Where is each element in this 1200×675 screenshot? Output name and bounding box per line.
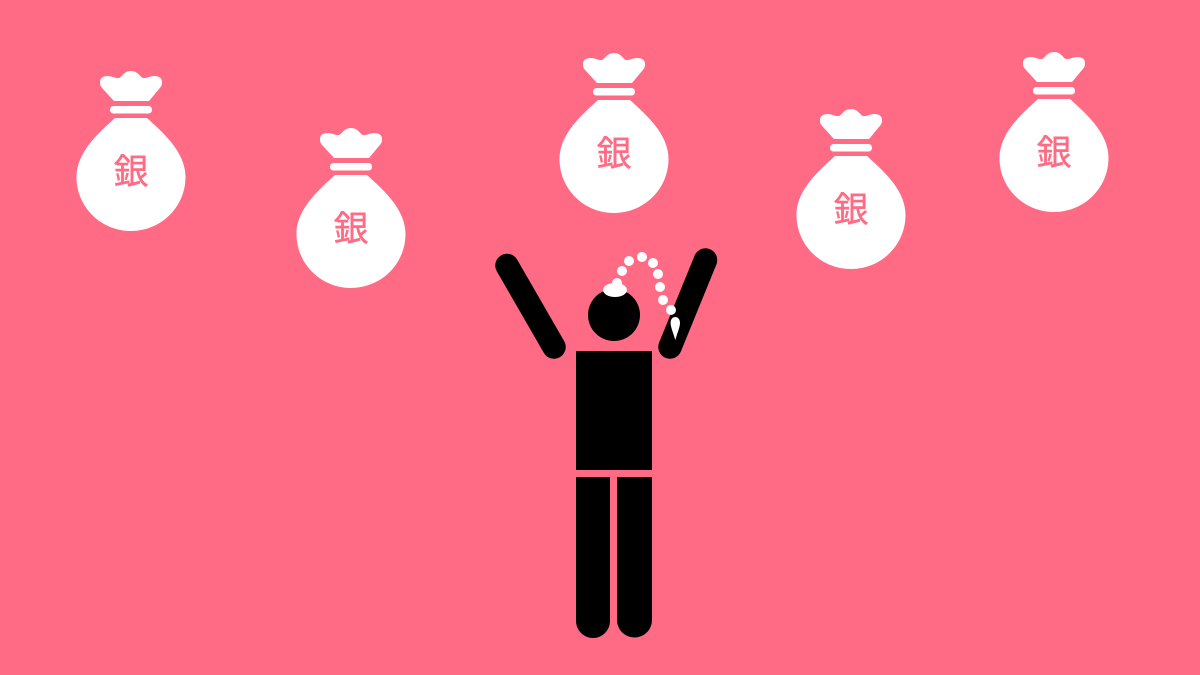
money bag 5: 銀 (1036, 134, 1072, 173)
sweat blob on head (603, 283, 627, 297)
money bag 5 (1000, 52, 1108, 212)
money bag 3 (560, 53, 668, 213)
left leg (576, 477, 610, 638)
right leg (617, 477, 652, 638)
left arm (507, 266, 554, 347)
head (588, 289, 640, 341)
money bag 1: 銀 (113, 153, 149, 192)
money bag 2: 銀 (333, 210, 369, 249)
money bag 4 (796, 109, 906, 269)
torso (576, 351, 652, 470)
money bag 1 (76, 71, 186, 231)
sweat drops arc (603, 252, 680, 340)
right arm (670, 260, 706, 347)
money bag 2 (296, 128, 406, 288)
money bag 3: 銀 (596, 135, 632, 174)
person with raised arms (507, 260, 706, 638)
falling drop (671, 317, 680, 340)
money bag 4: 銀 (833, 191, 869, 230)
